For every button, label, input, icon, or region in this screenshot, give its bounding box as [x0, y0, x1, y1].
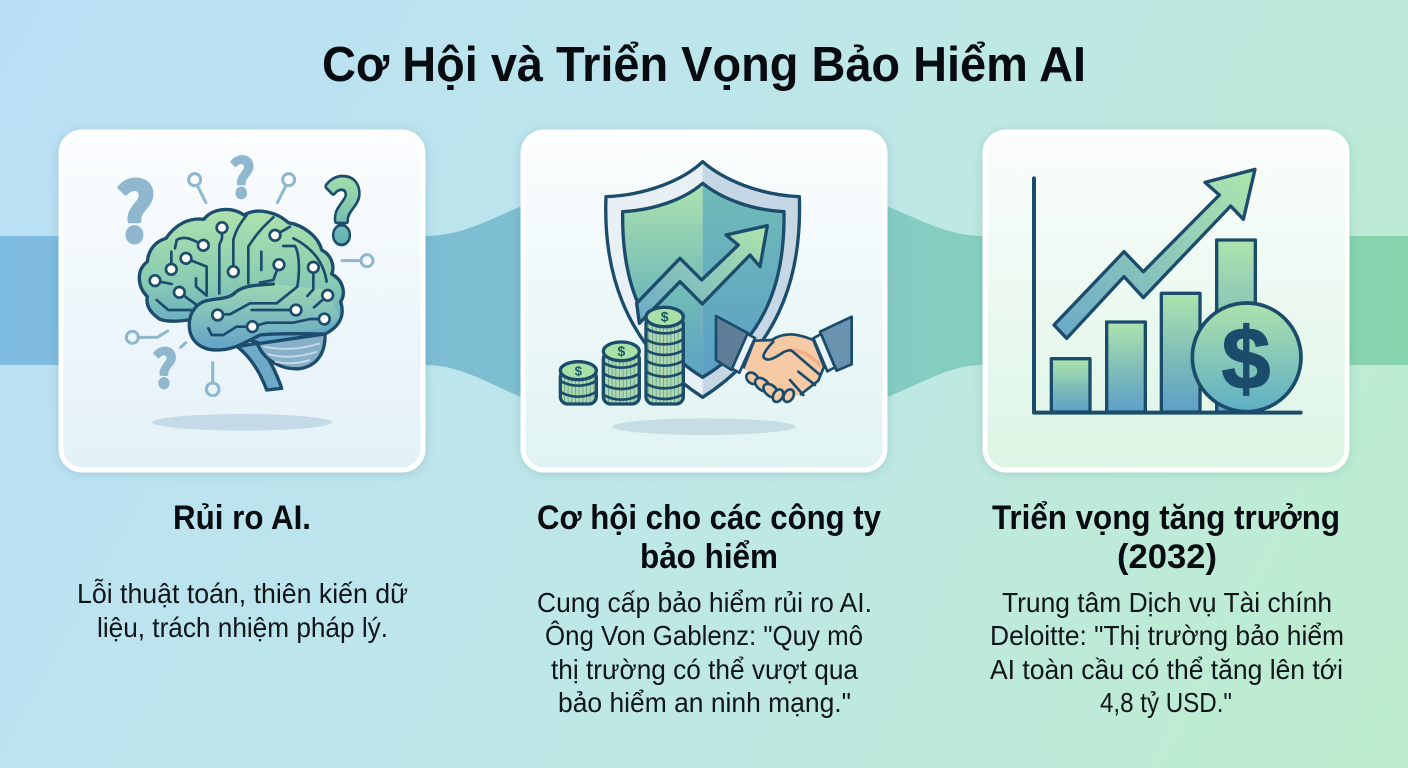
icon: shield, coins and handshake: $	[575, 363, 583, 378]
panel: AI risk card	[58, 131, 426, 474]
text: opportunity description: bảo hiểm an ninh mạng."	[558, 687, 851, 718]
text: opportunity description: thị trường có thể vượt qua	[551, 654, 858, 685]
text: growth description: Deloitte: "Thị trường bảo hiểm	[990, 620, 1344, 651]
icon: shield, coins and handshake	[560, 162, 852, 435]
text: opportunity description: Ông Von Gablenz: "Quy mô	[545, 620, 863, 651]
icon: brain with question marks: ?	[229, 138, 255, 214]
heading: opportunity for insurers	[537, 499, 881, 576]
text: growth description: Trung tâm Dịch vụ Tài chính	[1002, 587, 1332, 618]
text: AI risk description: Lỗi thuật toán, thiên kiến dữ	[77, 578, 408, 609]
text: AI risk description: liệu, trách nhiệm pháp lý.	[97, 612, 388, 643]
text: growth description: AI toàn cầu có thể tăng lên tới	[990, 654, 1343, 685]
icon: growth chart with dollar coin	[1034, 169, 1301, 413]
heading: growth outlook	[992, 499, 1340, 576]
icon: shield, coins and handshake: $	[661, 309, 669, 325]
coin stacks	[560, 307, 683, 404]
icon: brain with question marks: ?	[152, 329, 177, 403]
text: opportunity description: Cung cấp bảo hiểm rủi ro AI.	[537, 587, 872, 618]
heading: growth outlook: (2032)	[1117, 538, 1217, 576]
panel: insurer opportunity card	[520, 131, 888, 474]
icon: shield, coins and handshake: $	[617, 343, 625, 359]
text: AI risk description	[77, 578, 408, 643]
handshake	[716, 316, 748, 370]
title: Cơ Hội và Triển Vọng Bảo Hiểm AI	[322, 38, 1086, 92]
icon: brain with question marks	[116, 138, 373, 431]
icon: brain with question marks: ?	[324, 146, 361, 266]
icon: brain with question marks: ?	[324, 146, 361, 266]
heading: opportunity for insurers: Cơ hội cho các công ty	[537, 499, 881, 537]
heading: growth outlook: Triển vọng tăng trưởng	[992, 499, 1340, 537]
text: opportunity description	[537, 587, 872, 718]
icon: growth chart with dollar coin: $	[1222, 310, 1270, 408]
heading: AI risk: Rủi ro AI.	[173, 499, 311, 537]
text: growth description	[990, 587, 1344, 718]
heading: opportunity for insurers: bảo hiểm	[640, 538, 778, 576]
panel: growth outlook card	[982, 131, 1350, 474]
icon: brain with question marks: ?	[116, 150, 155, 266]
text: growth description: 4,8 tỷ USD."	[1100, 687, 1232, 718]
connecting band	[0, 206, 1408, 397]
